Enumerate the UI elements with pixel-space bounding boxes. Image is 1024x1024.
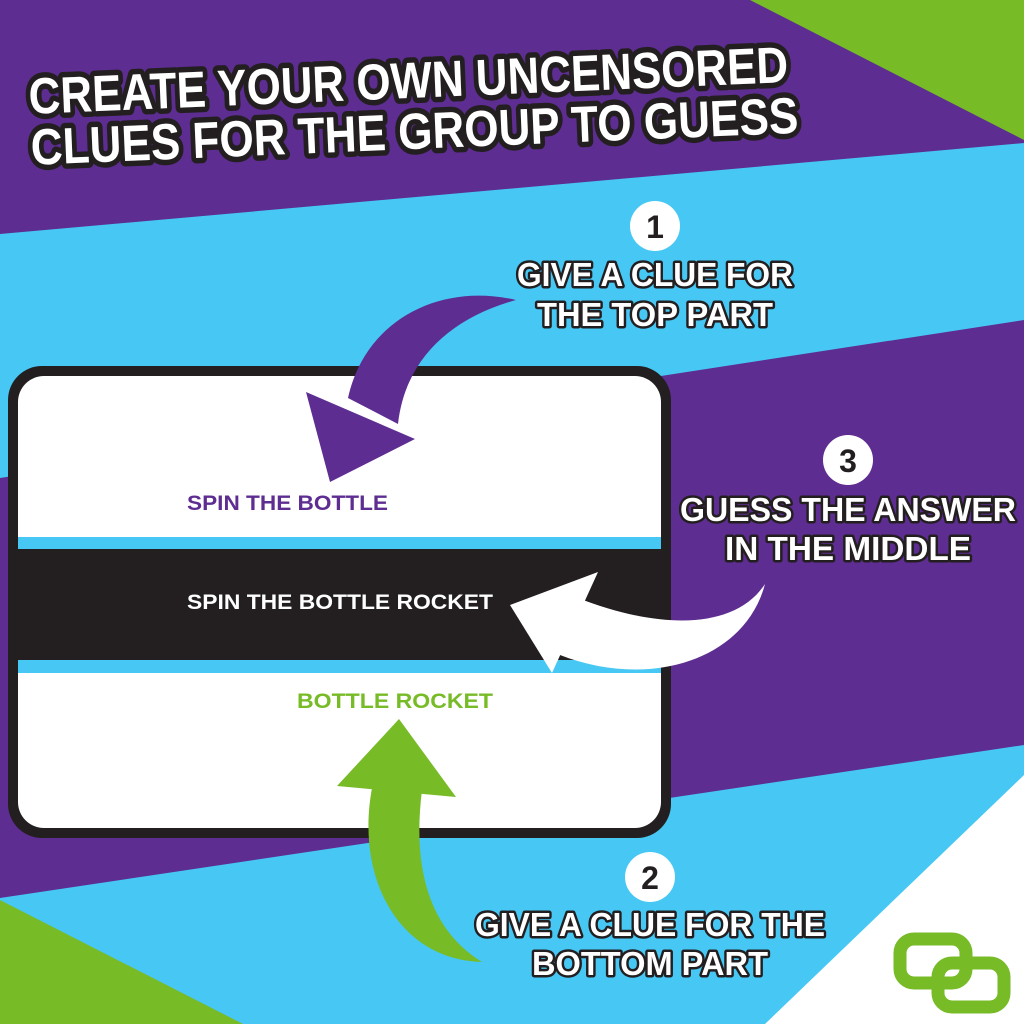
step 2: 2 (641, 860, 659, 896)
background: blue band (0, 143, 1024, 478)
step 2 (475, 852, 825, 982)
title: CLUES FOR THE GROUP TO GUESS (30, 87, 799, 176)
card (8, 366, 671, 838)
arrow: white to middle (510, 572, 765, 673)
background: green bottom-left triangle (0, 900, 243, 1024)
step 1: 1 (646, 209, 664, 245)
card text: bottom clue: BOTTLE ROCKET (297, 690, 493, 713)
card text: top clue: SPIN THE BOTTLE (187, 492, 388, 515)
logo: chain links (900, 939, 1004, 1007)
step 2: GIVE A CLUE FOR THE (475, 906, 825, 943)
background: white bottom-right triangle (765, 775, 1024, 1024)
step 1: GIVE A CLUE FOR (517, 256, 793, 293)
step 2: BOTTOM PART (532, 945, 768, 982)
title (27, 36, 799, 176)
step 3 (680, 435, 1016, 567)
step 3: IN THE MIDDLE (725, 530, 971, 567)
arrow: green to bottom (337, 719, 482, 962)
background: green top-right triangle (750, 0, 1024, 140)
step 3: 3 (839, 443, 857, 479)
arrow: purple to top (306, 296, 516, 482)
step 1: THE TOP PART (537, 296, 773, 333)
background: lower blue band (0, 745, 1024, 1024)
step 1 (517, 201, 793, 333)
card text: answer: SPIN THE BOTTLE ROCKET (187, 591, 493, 614)
step 3: GUESS THE ANSWER (680, 491, 1016, 528)
title: CREATE YOUR OWN UNCENSORED (27, 36, 789, 125)
